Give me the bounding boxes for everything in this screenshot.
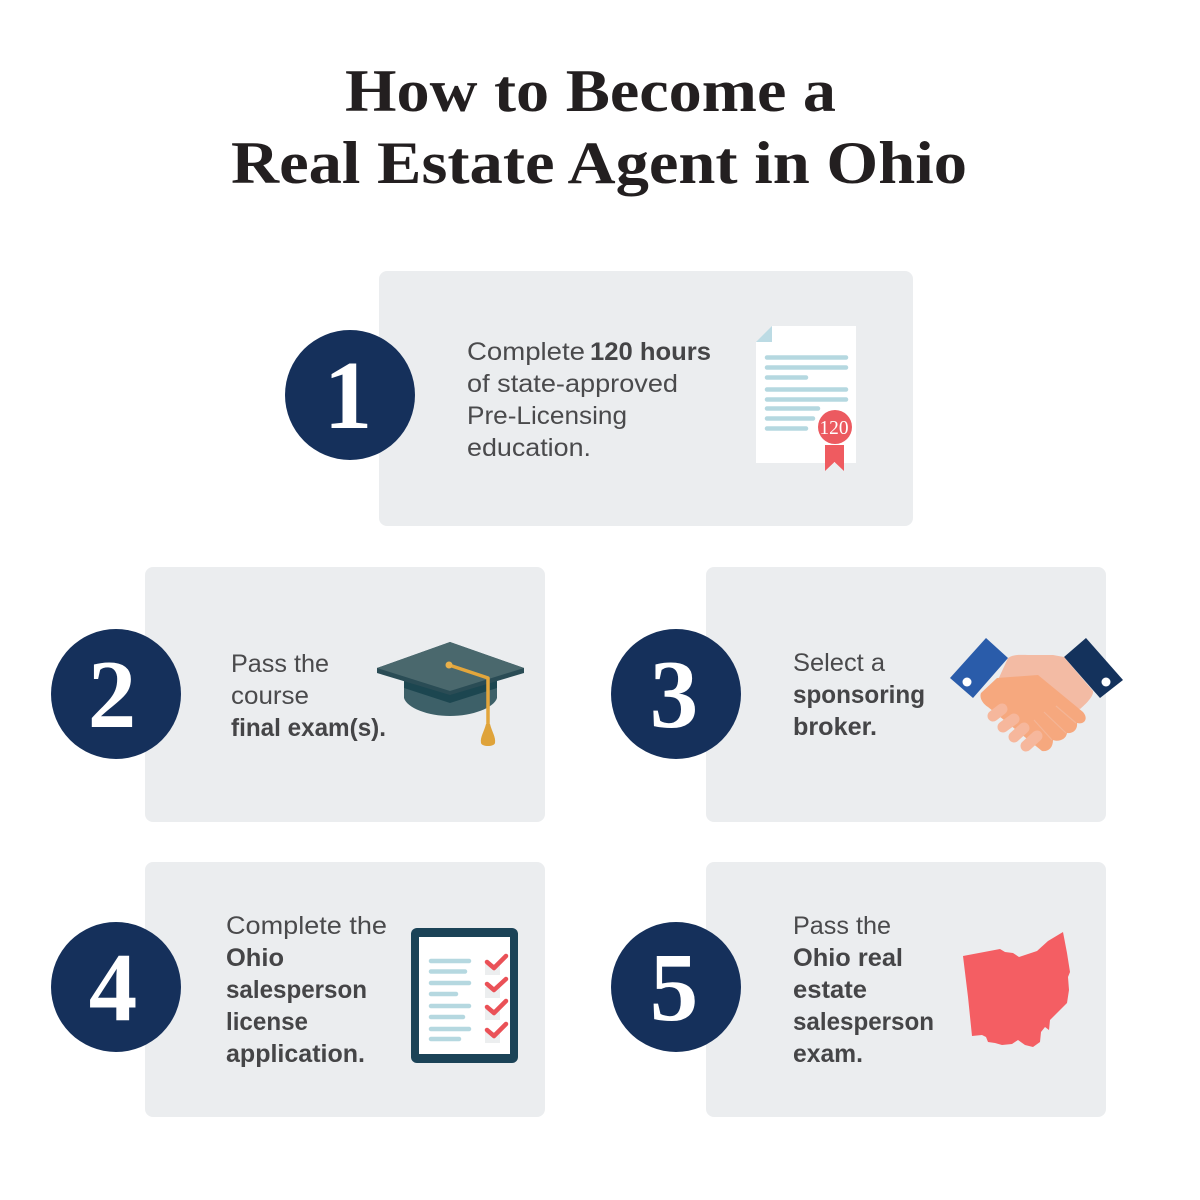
text: step 4: license — [226, 1008, 308, 1036]
card: step 5 — [706, 862, 1106, 1117]
text: step 5: salesperson — [793, 1008, 934, 1036]
text: step 1: Pre-Licensing — [467, 402, 627, 430]
number badge 1 — [285, 330, 415, 460]
title — [231, 58, 967, 196]
icon: handshake — [950, 638, 1123, 751]
text: step 5: Ohio real — [793, 944, 903, 972]
text: step 1: Complete — [467, 338, 585, 366]
panel: step 1 — [285, 271, 913, 526]
text: step 4: application. — [226, 1040, 365, 1068]
icon: certificate document — [756, 326, 856, 471]
panel: step 3 — [611, 567, 1123, 822]
text: step 3 — [793, 649, 925, 741]
number badge 1: 1 — [324, 342, 372, 449]
text: step 3: sponsoring — [793, 681, 925, 709]
text: step 1: of state-approved — [467, 370, 678, 398]
icon: graduation cap — [377, 642, 524, 746]
number badge 3 — [611, 629, 741, 759]
title: How to Become a — [345, 58, 836, 124]
text: step 2: course — [231, 682, 309, 710]
number badge 2 — [51, 629, 181, 759]
card: step 1 — [379, 271, 913, 526]
card: step 3 — [706, 567, 1106, 822]
text: step 4: Complete the — [226, 912, 387, 940]
text: step 2: Pass the — [231, 650, 329, 678]
panel: step 2 — [51, 567, 545, 822]
text: step 2: final exam(s). — [231, 714, 386, 742]
number badge 2: 2 — [88, 641, 136, 748]
panel: step 4 — [51, 862, 545, 1117]
text: step 4: salesperson — [226, 976, 367, 1004]
title: Real Estate Agent in Ohio — [231, 130, 967, 196]
text: step 4 — [226, 912, 387, 1068]
text: step 3: Select a — [793, 649, 885, 677]
text: step 1: 120 hours — [590, 338, 711, 366]
text: step 4: Ohio — [226, 944, 284, 972]
text: step 1 — [467, 338, 711, 462]
text: step 5: estate — [793, 976, 867, 1004]
panel: step 5 — [611, 862, 1106, 1117]
number badge 5 — [611, 922, 741, 1052]
icon: Ohio state map — [963, 932, 1070, 1047]
text: step 2 — [231, 650, 386, 742]
icon: checklist — [411, 928, 518, 1063]
number badge 5: 5 — [650, 934, 698, 1041]
card: step 4 — [145, 862, 545, 1117]
number badge 4: 4 — [89, 934, 137, 1041]
text: step 5: exam. — [793, 1040, 863, 1068]
text: step 5 — [793, 912, 934, 1068]
number badge 4 — [51, 922, 181, 1052]
icon: certificate document: 120 — [820, 417, 848, 439]
text: step 3: broker. — [793, 713, 877, 741]
text: step 5: Pass the — [793, 912, 891, 940]
number badge 3: 3 — [650, 641, 698, 748]
card: step 2 — [145, 567, 545, 822]
text: step 1: education. — [467, 434, 591, 462]
